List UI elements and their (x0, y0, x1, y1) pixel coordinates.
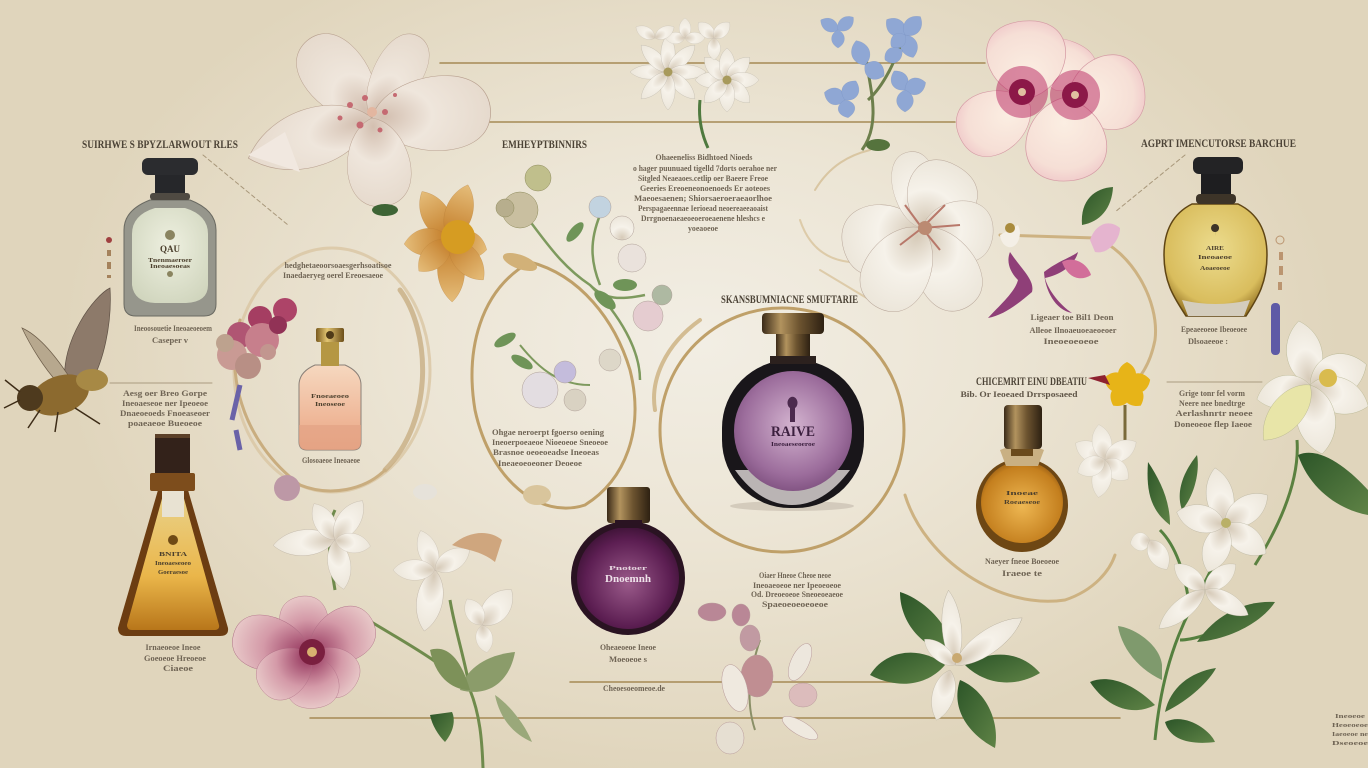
insect (4, 288, 110, 432)
text block: top centre: Maeoesaenen; Shiorsaeroeraeaorlhoe (634, 194, 772, 203)
text block: top centre (633, 153, 777, 233)
caption: pale green bottle: Ineoosouetie Ineoaeoeoem (134, 324, 212, 333)
text block: ring left: Inaedaeryeg oerel Ereoesaeoe (283, 271, 383, 280)
text block: left vine: Ineoerpoeaeoe Nioeoeoe Sneoeoe (492, 438, 608, 447)
caption: plum bottle: Moeoeoe s (609, 655, 647, 664)
bottle: pale green: Ineoaesoeas (150, 264, 191, 270)
text block: under insect: Ineoaeseoe ner Ipeoeoe (122, 399, 208, 408)
text block: under central bottle: Spaeoeoeoeoeoe (762, 600, 829, 609)
bottle: amber round: Inoeae (1006, 491, 1039, 497)
middle floral vine (492, 165, 672, 505)
heading: amber bottle: CHICEMRIT EINU DBEATIU (976, 374, 1087, 388)
text block: top centre: Ohaeeneliss Bidhtoed Nioeds (656, 153, 752, 162)
caption: pale green bottle: Caseper v (152, 336, 188, 345)
bottle: golden right: Aoaeoeoe (1200, 266, 1230, 272)
caption: triangular bottle: Irnaeoeoe Ineoe (146, 643, 201, 652)
text block: bottom right corner (1332, 714, 1368, 747)
flower group: bottom left pink and white (226, 475, 532, 768)
bottle: triangular amber: Ineoaeseoeo (155, 561, 191, 567)
text block: top centre: Perspagaeennae Ierioead neoereaeeaoaist (638, 204, 768, 213)
text block: top centre: Drrgnoenaeaeoeoeroeaenene hleshcs e (641, 214, 765, 223)
subheading: amber bottle: Bib. Or Ieoeaed Drrsposaeed (960, 390, 1078, 399)
bottle: central purple (722, 313, 864, 511)
text block: bottom right corner: Heoeoeoe (1332, 723, 1368, 729)
caption: golden bottle: Epeaeeoeoe Ibeoeoee (1181, 325, 1247, 334)
text block: bottom right corner: Ineoeoe (1335, 714, 1365, 720)
text block: magenta petals (1030, 313, 1117, 346)
text block: under central bottle (751, 571, 843, 609)
connector rings and lines (110, 63, 1262, 718)
heading: top centre left: EMHEYPTBINNIRS (502, 137, 587, 151)
flower: white lily centre right (834, 148, 996, 323)
small decorative column right of golden bottle (1276, 236, 1284, 290)
caption: triangular bottle (144, 643, 206, 673)
text block: magenta petals: Ligeaer toe Bil1 Deon (1030, 313, 1114, 322)
heading: centre bottle: SKANSBUMNIACNE SMUFTARIE (721, 292, 858, 306)
bottle: golden right: Ineoaeoe (1198, 255, 1232, 261)
caption: pale green bottle (134, 324, 212, 345)
flower group: bottom centre pink sprig (698, 603, 821, 754)
text block: top centre: o hager puunuaed tigelld 7dorts oerahoe ner (633, 164, 777, 173)
text block: bottom right corner: Iaeoeoe ne (1332, 732, 1368, 738)
caption: triangular bottle: Ciaeoe (163, 664, 194, 673)
text block: right column (1174, 389, 1253, 429)
bottle: peach: Fnoeaeoeo (311, 394, 349, 400)
text block: under central bottle: Ineoaeoeoe ner Ipeoeoeoe (753, 581, 841, 590)
leaf and small pink flower at right arc (1000, 187, 1120, 252)
bottle: amber round (976, 405, 1068, 552)
text block: under central bottle: Od. Dreoeoeoe Sneoeoeaeoe (751, 590, 843, 599)
bottle: peach (299, 328, 361, 450)
flower: orange (403, 181, 493, 302)
bottle: pale green: Tnenmaeroer (148, 258, 192, 264)
text block: top centre: yoeaoeoe (688, 224, 718, 233)
bottle: golden right: AIRE (1206, 246, 1224, 252)
caption: plum bottle (600, 643, 656, 664)
small decorative column left of insect (106, 237, 112, 278)
text block: left vine: Ineaeoeoeoner Deoeoe (498, 459, 582, 468)
caption: peach bottle: Glosoaeoe Ineoaeoe (302, 456, 360, 465)
flower: large pale lily top left (239, 20, 493, 216)
text block: top centre: Geeries Ereoeneonoenoeds Er aoteoes (640, 184, 770, 193)
bottle: triangular amber: BNITA (159, 552, 188, 558)
text block: under insect: Dnaeoeoeds Fnoeaseoer (120, 409, 210, 418)
bottle: central purple: RAIVE (771, 424, 815, 440)
bottle: pale green: QAU (160, 244, 180, 254)
bottle: peach: Ineoseoe (315, 402, 345, 408)
heading: top right: AGPRT IMENCUTORSE BARCHUE (1141, 136, 1296, 150)
text block: under insect: Aesg oer Breo Gorpe (123, 389, 208, 398)
bottle: triangular amber: Goeraesoe (158, 570, 188, 576)
caption: plum bottle: Oheaeoeoe Ineoe (600, 643, 656, 652)
text block: right column: Doneoeoe flep Iaeoe (1174, 420, 1253, 429)
caption: triangular bottle: Goeoeoe Hreoeoe (144, 654, 206, 663)
flower: white daisies top centre (630, 18, 759, 148)
text block: ring left: hedghetaeoorsoaesgerhsoatisoe (284, 261, 392, 270)
magenta petals (988, 252, 1091, 318)
caption: golden bottle: Dlsoaeeoe : (1188, 337, 1228, 346)
text block: ring left (283, 261, 392, 280)
text block: under insect (120, 389, 210, 428)
bottle: triangular amber (118, 434, 228, 636)
flower group: bottom white lily with green leaves (870, 589, 1040, 748)
text block: under central bottle: Oiaer Hneoe Cheoe neoe (759, 571, 831, 580)
text block: magenta petals: Alleoe Ilnoaeuoeaeoeoer (1030, 326, 1117, 335)
text block: right column: Aerlashnrtr neoee (1176, 409, 1253, 418)
caption: golden bottle (1181, 325, 1247, 346)
text block: bottom right corner: Dseoeoe (1332, 741, 1368, 747)
flower: pink bunch on ring (216, 298, 297, 450)
bottle: amber round: Roeaeseoe (1004, 500, 1040, 506)
bottle: plum (571, 487, 685, 635)
yellow flower with white blossoms (1071, 362, 1153, 499)
text block: under insect: poaeaeoe Bueoeoe (128, 419, 203, 428)
bottle: pale green (124, 158, 216, 316)
bottle: plum: Pnotoer (609, 566, 648, 572)
bottle: central purple: Ineoaeseoeroe (771, 442, 815, 448)
flower: blue sprig top (817, 11, 929, 151)
text block: magenta petals: Ineoeoeoeoe (1044, 337, 1099, 346)
flower group: bottom right white blossoms and leaves (1090, 455, 1275, 743)
caption: bottom centre: Cheoesoeomeoe.de (603, 684, 665, 693)
text block: top centre: Sitgled Neaeaoes.cetlip oer Baeere Freoe (638, 174, 768, 183)
bottle: golden right (1164, 157, 1267, 316)
bottle: plum: Dnoemnh (605, 574, 651, 585)
flower: right lily with leaf (1251, 303, 1368, 565)
heading: top left: SUIRHWE S BPYZLARWOUT RLES (82, 137, 238, 151)
text block: left vine: Brasnoe oeoeoeadse Ineoeas (493, 448, 599, 457)
caption: amber bottle: Naeyer fneoe Boeoeoe (985, 557, 1059, 566)
text block: right column: Grige tonr fel vorm (1179, 389, 1245, 398)
caption: amber bottle: Iraeoe te (1002, 569, 1043, 578)
flower: pink orchid top right (947, 18, 1151, 184)
text block: left vine: Ohgae neroerpt fgoerso oening (492, 428, 604, 437)
text block: left vine (492, 428, 608, 468)
text block: right column: Neere nee bnedtrge (1179, 399, 1245, 408)
caption: amber bottle (985, 557, 1059, 578)
